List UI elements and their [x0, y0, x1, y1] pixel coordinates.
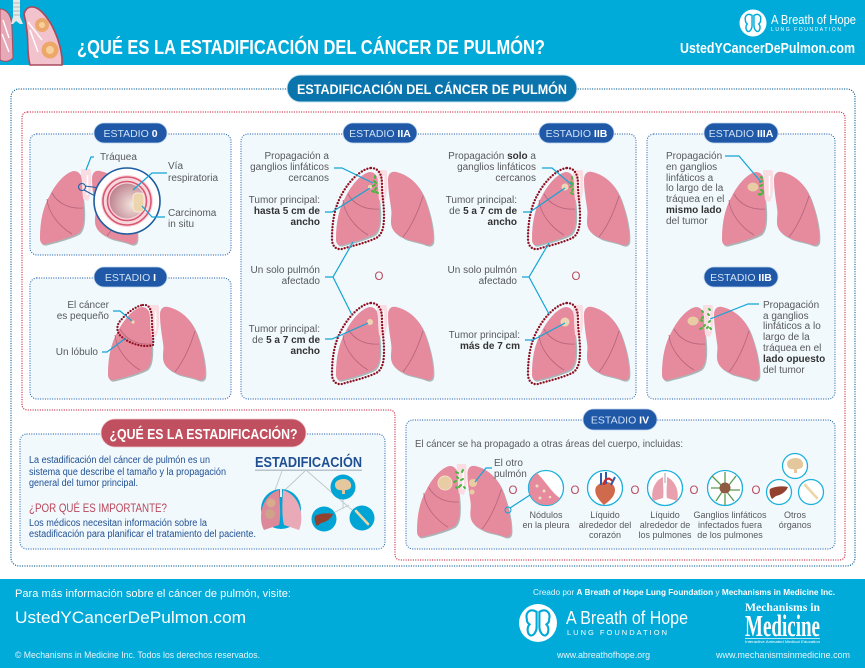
- panel: estadio II: [241, 123, 636, 399]
- stage pill: ESTADIO IV: [591, 414, 649, 426]
- labels IIB: Un solo pulmón: [448, 265, 517, 276]
- panel: qué es la estadificación: [20, 419, 385, 549]
- connector O: O: [690, 485, 699, 497]
- labels IIB: Tumor principal:: [449, 330, 520, 341]
- connector O IIA: O: [375, 271, 384, 283]
- labels IIB: Tumor principal:: [446, 195, 517, 206]
- lungs with lobe outlined: [108, 305, 206, 382]
- lungs with metastases: [417, 464, 530, 538]
- stage pill IIA: ESTADIO IIA: [349, 128, 411, 140]
- staging diagram: [255, 453, 374, 532]
- stage pill IIIA: [704, 123, 778, 143]
- label: other lung: El otro: [494, 458, 523, 469]
- label IIB lower: linfáticos a lo: [763, 321, 821, 332]
- lungs IIB top: [528, 168, 630, 249]
- stage pill IIB: ESTADIO IIB: [546, 128, 608, 140]
- section heading: [287, 75, 577, 102]
- label IIB lower: tráquea en el: [763, 343, 821, 354]
- label IIIA: mismo lado: [666, 205, 722, 216]
- lungs IIIA: [722, 170, 820, 247]
- section heading: ESTADIFICACIÓN DEL CÁNCER DE PULMÓN: [297, 80, 567, 97]
- label IIB lower: [710, 300, 825, 376]
- organ labels: Ganglios linfáticos: [693, 510, 767, 520]
- stage pill: ESTADIO 0: [103, 128, 158, 140]
- footer link: UstedYCancerDePulmon.com: [15, 608, 246, 627]
- icon: lymph node: [708, 470, 742, 506]
- panel: estadio 0: [30, 123, 231, 255]
- footer band: [0, 579, 865, 668]
- label IIIA: linfáticos a: [666, 173, 714, 184]
- organ labels: Líquido: [650, 510, 680, 520]
- icon: lungs: [261, 488, 301, 530]
- stage pill: [94, 267, 167, 287]
- labels: Un lóbulo: [56, 347, 98, 358]
- labels IIB: cercanos: [495, 173, 536, 184]
- footer info text: Para más información sobre el cáncer de pulmón, visite:: [15, 588, 291, 600]
- organ labels: en la pleura: [522, 520, 570, 530]
- definition text: sistema que describe el tamaño y la propagación: [29, 467, 226, 478]
- stage pill: ESTADIO I: [105, 272, 156, 284]
- label IIB lower: Propagación: [763, 300, 819, 311]
- labels: [56, 300, 132, 358]
- stage pill IIB: [539, 123, 614, 143]
- organ labels: órganos: [779, 520, 812, 530]
- importance text: estadificación para planificar el tratamiento del paciente.: [29, 529, 256, 540]
- label IIIA: lo largo de la: [666, 183, 724, 194]
- labels: Carcinoma: [168, 208, 217, 219]
- organ labels: [522, 510, 812, 540]
- labels IIA: ganglios linfáticos: [250, 162, 329, 173]
- icon: lungs illustration: [0, 0, 62, 65]
- intro text: El cáncer se ha propagado a otras áreas del cuerpo, incluidas:: [415, 438, 683, 450]
- connector O: O: [752, 485, 761, 497]
- icon: airway magnified: [78, 168, 160, 234]
- labels IIA: hasta 5 cm de: [254, 206, 320, 217]
- definition text: La estadificación del cáncer de pulmón es un: [29, 455, 210, 466]
- label: other lung: [475, 458, 527, 482]
- label: other lung: pulmón: [494, 469, 527, 480]
- labels IIB: ancho: [488, 217, 517, 228]
- logo: A Breath of Hope footer: [519, 604, 688, 642]
- labels IIA: ancho: [291, 217, 320, 228]
- panel: estadio I: [30, 267, 231, 399]
- labels IIA: Propagación a: [264, 151, 329, 162]
- panel: estadio III: [647, 123, 835, 399]
- connector O: O: [571, 485, 580, 497]
- labels: Vía: [168, 161, 183, 172]
- label IIIA: tráquea en el: [666, 194, 724, 205]
- logo: A Breath of Hope: [740, 10, 856, 36]
- labels: [86, 152, 218, 230]
- definition text: [29, 455, 226, 489]
- label IIIA: en ganglios: [666, 162, 717, 173]
- labels IIB: Propagación solo a: [448, 151, 536, 162]
- icon: lungs fluid: [648, 470, 682, 506]
- organ labels: Líquido: [590, 510, 620, 520]
- icon: bone: [350, 506, 374, 530]
- labels IIA: Tumor principal:: [249, 324, 320, 335]
- website links: www.abreathofhope.org: [556, 650, 650, 660]
- organ labels: de los pulmones: [697, 530, 763, 540]
- connector O: O: [631, 485, 640, 497]
- icon: brain: [330, 474, 356, 500]
- labels: es pequeño: [57, 311, 109, 322]
- connector O: [509, 485, 761, 497]
- logo: Mechanisms in Medicine: Medicine: [745, 608, 820, 643]
- header band: [0, 0, 865, 65]
- labels IIA: Tumor principal:: [249, 195, 320, 206]
- organ labels: corazón: [589, 530, 621, 540]
- labels IIB: de 5 a 7 cm de: [449, 206, 517, 217]
- credit line: Creado por A Breath of Hope Lung Foundation y Mechanisms in Medicine Inc.: [533, 587, 835, 597]
- labels: El cáncer: [67, 300, 110, 311]
- stage pill: [583, 409, 657, 430]
- logo: Mechanisms in Medicine: [745, 600, 820, 644]
- labels IIA: de 5 a 7 cm de: [252, 335, 320, 346]
- organ labels: Otros: [784, 510, 806, 520]
- labels: respiratoria: [168, 173, 218, 184]
- organ labels: alrededor de: [640, 520, 690, 530]
- label IIB lower: lado opuesto: [763, 354, 825, 365]
- connector O IIB: O: [572, 271, 581, 283]
- labels IIA: ancho: [291, 346, 320, 357]
- labels IIB: [446, 151, 572, 352]
- title: ¿QUÉ ES LA ESTADIFICACIÓN DEL CÁNCER DE PULMÓN?: [77, 35, 545, 59]
- label IIB lower: del tumor: [763, 365, 805, 376]
- panel: estadio IV: [406, 409, 835, 549]
- staging diagram: ESTADIFICACIÓN: [255, 453, 362, 471]
- heading pill: ¿QUÉ ES LA ESTADIFICACIÓN?: [110, 425, 298, 443]
- organ labels: infectados fuera: [698, 520, 762, 530]
- icon: liver: [312, 506, 336, 532]
- logo: A Breath of Hope footer: LUNG FOUNDATION: [567, 628, 667, 637]
- importance text: [29, 518, 256, 540]
- website links: [556, 650, 850, 660]
- stage pill: [94, 123, 167, 143]
- labels: Tráquea: [100, 152, 137, 163]
- label IIIA: del tumor: [666, 216, 708, 227]
- copyright: © Mechanisms in Medicine Inc. Todos los derechos reservados.: [15, 650, 260, 660]
- labels: in situ: [168, 219, 194, 230]
- label IIB lower: a ganglios: [763, 311, 809, 322]
- heading pill: [101, 419, 306, 447]
- logo: Mechanisms in Medicine: Mechanisms in: [745, 600, 820, 614]
- icon: heart: [588, 470, 622, 506]
- labels IIB: más de 7 cm: [460, 341, 520, 352]
- logo: A Breath of Hope: LUNG FOUNDATION: [771, 27, 841, 33]
- lungs IIA top: [332, 168, 434, 249]
- red stage frame: [22, 112, 845, 560]
- logo: A Breath of Hope footer: A Breath of Hope: [566, 608, 688, 628]
- lungs IIB bottom: [528, 303, 630, 384]
- icon: pleural nodules: [528, 470, 564, 506]
- label IIIA: Propagación: [666, 151, 722, 162]
- labels IIA: afectado: [282, 276, 320, 287]
- organ labels: Nódulos: [529, 510, 563, 520]
- lungs IIA bottom: [332, 303, 434, 384]
- lungs: [40, 169, 138, 246]
- stage pill IIB lower: ESTADIO IIB: [710, 272, 772, 284]
- logo: Mechanisms in Medicine: Interactive Animated Medical Education: [745, 639, 820, 644]
- labels IIA: cercanos: [288, 173, 329, 184]
- icon: other organs: [766, 454, 824, 504]
- subheading: ¿POR QUÉ ES IMPORTANTE?: [29, 502, 167, 515]
- label IIB lower: largo de la: [763, 332, 810, 343]
- organ labels: alrededor del: [579, 520, 631, 530]
- labels IIB: ganglios linfáticos: [457, 162, 536, 173]
- stage pill IIA: [343, 123, 417, 143]
- labels IIA: Un solo pulmón: [251, 265, 320, 276]
- importance text: Los médicos necesitan información sobre la: [29, 518, 207, 529]
- labels IIA: [249, 151, 373, 357]
- connector O: O: [509, 485, 518, 497]
- lungs IIB lower: [662, 305, 760, 382]
- definition text: general del tumor principal.: [29, 478, 138, 489]
- label IIIA: [666, 151, 761, 227]
- outer dotted frame: [11, 89, 855, 566]
- labels IIB: afectado: [479, 276, 517, 287]
- stage pill IIIA: ESTADIO IIIA: [709, 128, 774, 140]
- stage pill IIB lower: [704, 267, 778, 287]
- website links: www.mechanismsinmedicine.com: [715, 650, 850, 660]
- organ labels: los pulmones: [638, 530, 692, 540]
